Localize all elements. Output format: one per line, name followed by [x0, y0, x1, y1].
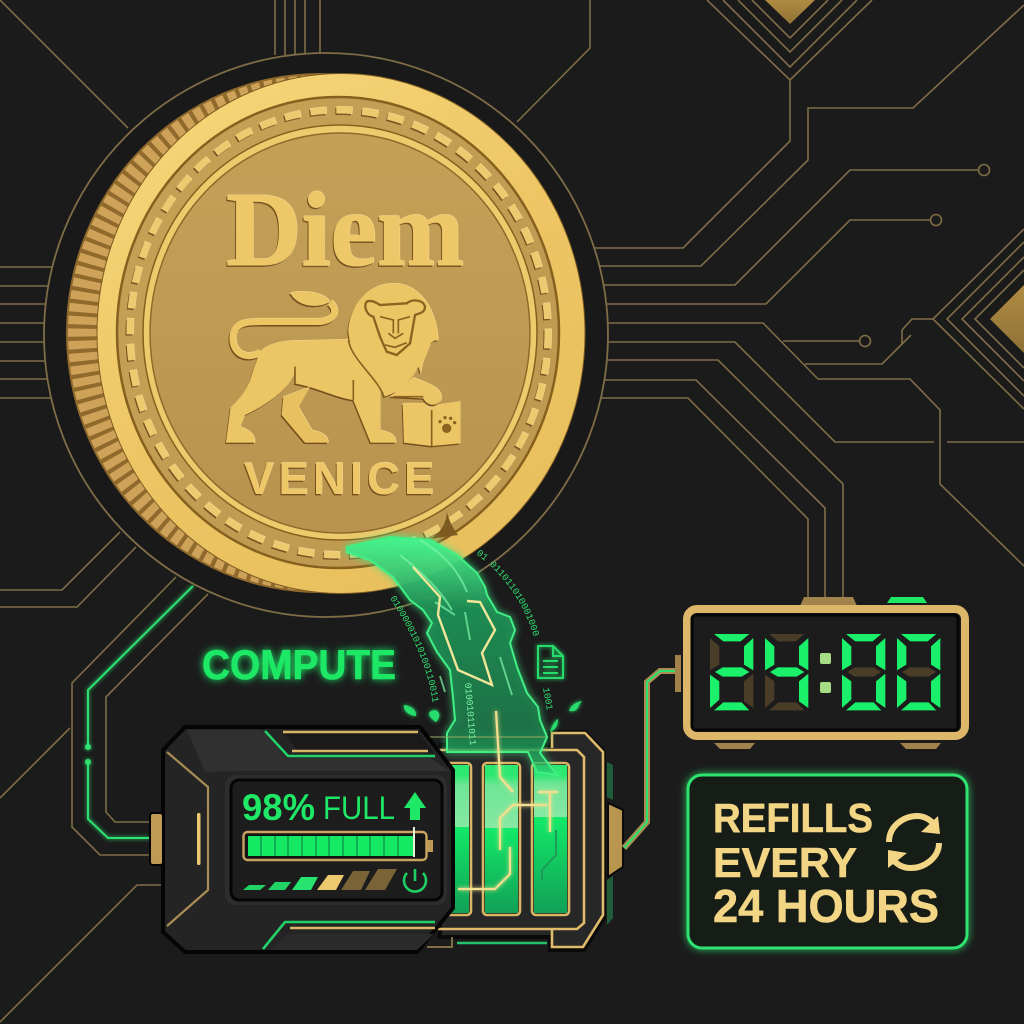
cell two	[483, 763, 520, 915]
clock left foot	[714, 743, 755, 749]
battery device	[150, 727, 453, 952]
binary stream left	[390, 598, 433, 705]
coin edge	[66, 73, 574, 593]
lion tail	[233, 303, 334, 356]
housing inner gold	[436, 750, 584, 929]
binary stream small	[543, 688, 548, 716]
cell one	[434, 763, 471, 915]
housing body	[440, 732, 604, 950]
digit 4	[765, 634, 808, 710]
full label: FULL	[323, 790, 395, 826]
binary stream middle	[465, 683, 470, 745]
device bottom gold bar	[290, 927, 435, 929]
signal ramp	[243, 869, 397, 890]
digit 0 first	[842, 634, 885, 710]
bottom green trace	[457, 942, 547, 944]
text: 01000001010100110011	[391, 596, 439, 702]
compute label: COMPUTE	[202, 641, 396, 688]
icon: refresh arrows	[888, 816, 940, 868]
coin title: Diem	[226, 171, 464, 288]
refill line one: REFILLS	[713, 795, 873, 841]
icon: power	[404, 869, 426, 892]
screen display	[231, 780, 442, 900]
coin face	[97, 74, 585, 594]
lion far leg	[282, 387, 328, 443]
icon: document	[538, 646, 563, 678]
clock screen edge	[692, 615, 958, 730]
clock colon	[820, 653, 831, 693]
clock left connector	[675, 655, 681, 692]
lion mane	[348, 283, 438, 397]
battery cells housing	[427, 732, 623, 950]
device bottom plate	[270, 934, 434, 950]
bottom gold trace	[427, 937, 452, 947]
lion paw	[390, 377, 442, 405]
device plug	[150, 813, 163, 865]
text: 01 0110110100010001	[477, 550, 539, 636]
icon: droplets	[404, 701, 582, 732]
device shell	[163, 727, 453, 952]
digit 0 second	[897, 634, 940, 710]
side connector	[608, 803, 623, 877]
side green fins	[607, 762, 613, 925]
device left gold bar	[197, 813, 200, 865]
device top gold bars	[283, 732, 428, 751]
clock right foot	[900, 743, 941, 749]
device top plate	[282, 731, 434, 753]
binary stream right	[476, 554, 534, 638]
device left gold facet	[167, 752, 208, 926]
device top green trace	[265, 731, 435, 756]
stream highlights	[400, 540, 512, 695]
screen	[225, 775, 447, 905]
refill line two: EVERY	[713, 839, 857, 886]
device top facet	[187, 730, 450, 772]
clock top button	[800, 597, 857, 606]
percent label: 98%	[242, 787, 315, 828]
lion emblem	[226, 283, 460, 446]
icon: up arrow	[404, 792, 426, 820]
digital clock	[675, 597, 965, 749]
coin edge reeding	[85, 92, 555, 574]
coin field	[150, 133, 530, 533]
lion face	[295, 300, 456, 446]
connector trace to clock	[624, 671, 676, 848]
text: 01001011011	[465, 683, 476, 746]
stream crossing line	[424, 736, 546, 738]
coin lower text: VENICE	[244, 453, 434, 504]
inner ring	[143, 125, 537, 540]
charge bar	[244, 827, 433, 860]
tail tuft	[290, 292, 330, 306]
clock green button	[887, 597, 927, 603]
cell green traces	[542, 830, 556, 880]
compute stream	[347, 537, 557, 775]
rim dashes	[130, 110, 548, 555]
icon: top diamond	[765, 0, 815, 24]
coin notch	[430, 512, 458, 539]
panel border	[688, 775, 967, 948]
green power trace	[86, 586, 193, 838]
rim groove	[117, 97, 559, 568]
outer ring	[44, 53, 608, 617]
digit 2	[710, 634, 753, 710]
device bottom green trace	[263, 922, 435, 949]
stream yellow circuit	[413, 567, 495, 685]
coin	[66, 73, 585, 594]
refill line three: 24 HOURS	[713, 880, 939, 932]
housing outer gold	[552, 733, 603, 947]
refill panel	[688, 775, 967, 948]
cell circuit traces	[458, 711, 558, 889]
icon: right diamond	[990, 285, 1024, 353]
clock frame	[687, 609, 965, 736]
text: 1001	[543, 688, 553, 710]
lion book	[403, 402, 460, 446]
cell three	[532, 763, 569, 915]
lion body	[226, 339, 396, 443]
